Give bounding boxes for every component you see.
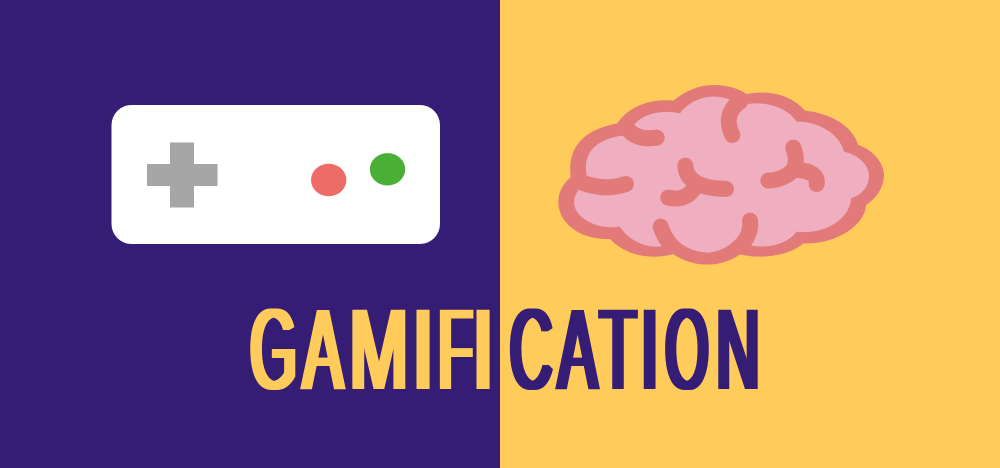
title part: CATION: O: [666, 286, 708, 414]
title part: CATION: N: [716, 286, 760, 414]
panel: yellow right background: [500, 0, 1000, 468]
brain inner fill: [574, 97, 869, 254]
controller body: [112, 105, 440, 244]
title part: CATION: [510, 284, 760, 414]
title part: GAMIFI: F: [438, 286, 473, 414]
panel: purple left background: [0, 0, 500, 468]
title part: CATION: C: [510, 286, 552, 414]
title part: CATION: A: [558, 286, 597, 414]
directional pad: [147, 142, 218, 208]
title part: GAMIFI: A: [303, 286, 343, 414]
icon: brain: [558, 85, 884, 265]
title part: CATION: T: [600, 286, 636, 414]
icon: game controller: [112, 105, 440, 244]
title part: GAMIFI: I: [412, 285, 434, 414]
brain folds: [580, 102, 817, 261]
title part: GAMIFI: G: [250, 286, 297, 414]
green button: [370, 153, 405, 186]
title part: CATION: I: [641, 284, 658, 414]
title part: GAMIFI: M: [350, 286, 408, 414]
red button: [311, 164, 346, 196]
title: GAMIFICATION: [250, 284, 760, 414]
title part: GAMIFI: [250, 285, 494, 414]
title part: GAMIFI: I: [472, 285, 494, 414]
brain outer outline: [558, 85, 884, 265]
